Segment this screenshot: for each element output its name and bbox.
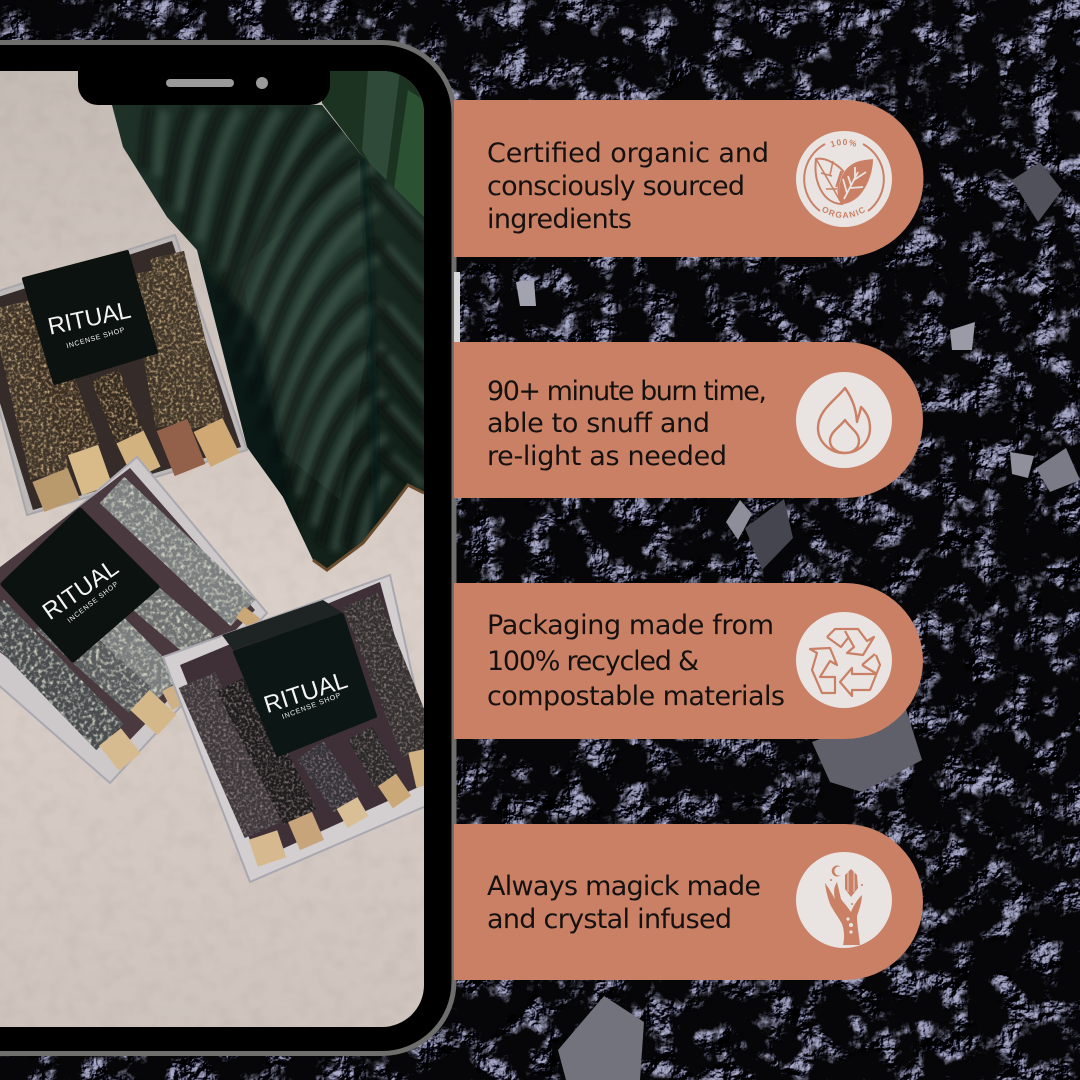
text: burn time: re-light as needed: [487, 441, 727, 472]
photo: RITUAL label 3: INCENSE SHOP: [281, 692, 342, 721]
panel: burn time: [454, 342, 923, 498]
icon: 100% organic: [796, 131, 892, 227]
text: packaging: Packaging made from: [487, 610, 774, 641]
photo: RITUAL label 3: [222, 600, 375, 755]
photo: incense box 3: [163, 575, 440, 882]
icon: hand with crystal: [796, 852, 892, 948]
photo: RITUAL label 1: RITUAL: [46, 297, 133, 341]
phone: [0, 42, 460, 1054]
phone notch: [78, 60, 330, 105]
photo: RITUAL label 2: RITUAL: [38, 554, 124, 626]
notch speaker: [166, 79, 234, 87]
text: burn time: able to snuff and: [487, 408, 710, 439]
text: packaging: compostable materials: [487, 681, 785, 712]
panel: certified organic: [454, 100, 924, 257]
photo: incense box 2: [0, 457, 267, 783]
text: magick: and crystal infused: [487, 904, 732, 935]
phone body: [0, 42, 454, 1054]
icon: recycle: [796, 612, 892, 708]
photo: incense box 1: [0, 235, 247, 515]
photo: main leaf: [112, 105, 424, 568]
text: magick: Always magick made: [487, 871, 761, 902]
photo: back leaf: [322, 71, 424, 217]
photo: RITUAL label 1: INCENSE SHOP: [66, 327, 126, 350]
text: certified organic: ingredients: [487, 204, 632, 235]
panel: packaging: [454, 583, 923, 739]
photo: RITUAL label 1: [24, 252, 156, 383]
panel: magick: [454, 824, 923, 980]
photo: RITUAL label 3: RITUAL: [261, 667, 351, 719]
phone screen photo: [0, 71, 440, 1027]
phone side button: [454, 272, 460, 394]
text: certified organic: consciously sourced: [487, 171, 745, 202]
icon: 100% organic: ORGANIC: [822, 206, 865, 218]
photo: leaf tip: [313, 485, 424, 570]
photo: RITUAL label 2: [3, 510, 157, 660]
icon: flame: [796, 372, 892, 468]
text: packaging: 100% recycled &: [487, 646, 699, 677]
text: burn time: 90+ minute burn time,: [487, 376, 767, 407]
text: certified organic: Certified organic and: [487, 138, 769, 169]
notch camera: [256, 77, 268, 89]
photo: RITUAL label 2: INCENSE SHOP: [66, 581, 120, 625]
icon: 100% organic: 100%: [830, 139, 856, 148]
